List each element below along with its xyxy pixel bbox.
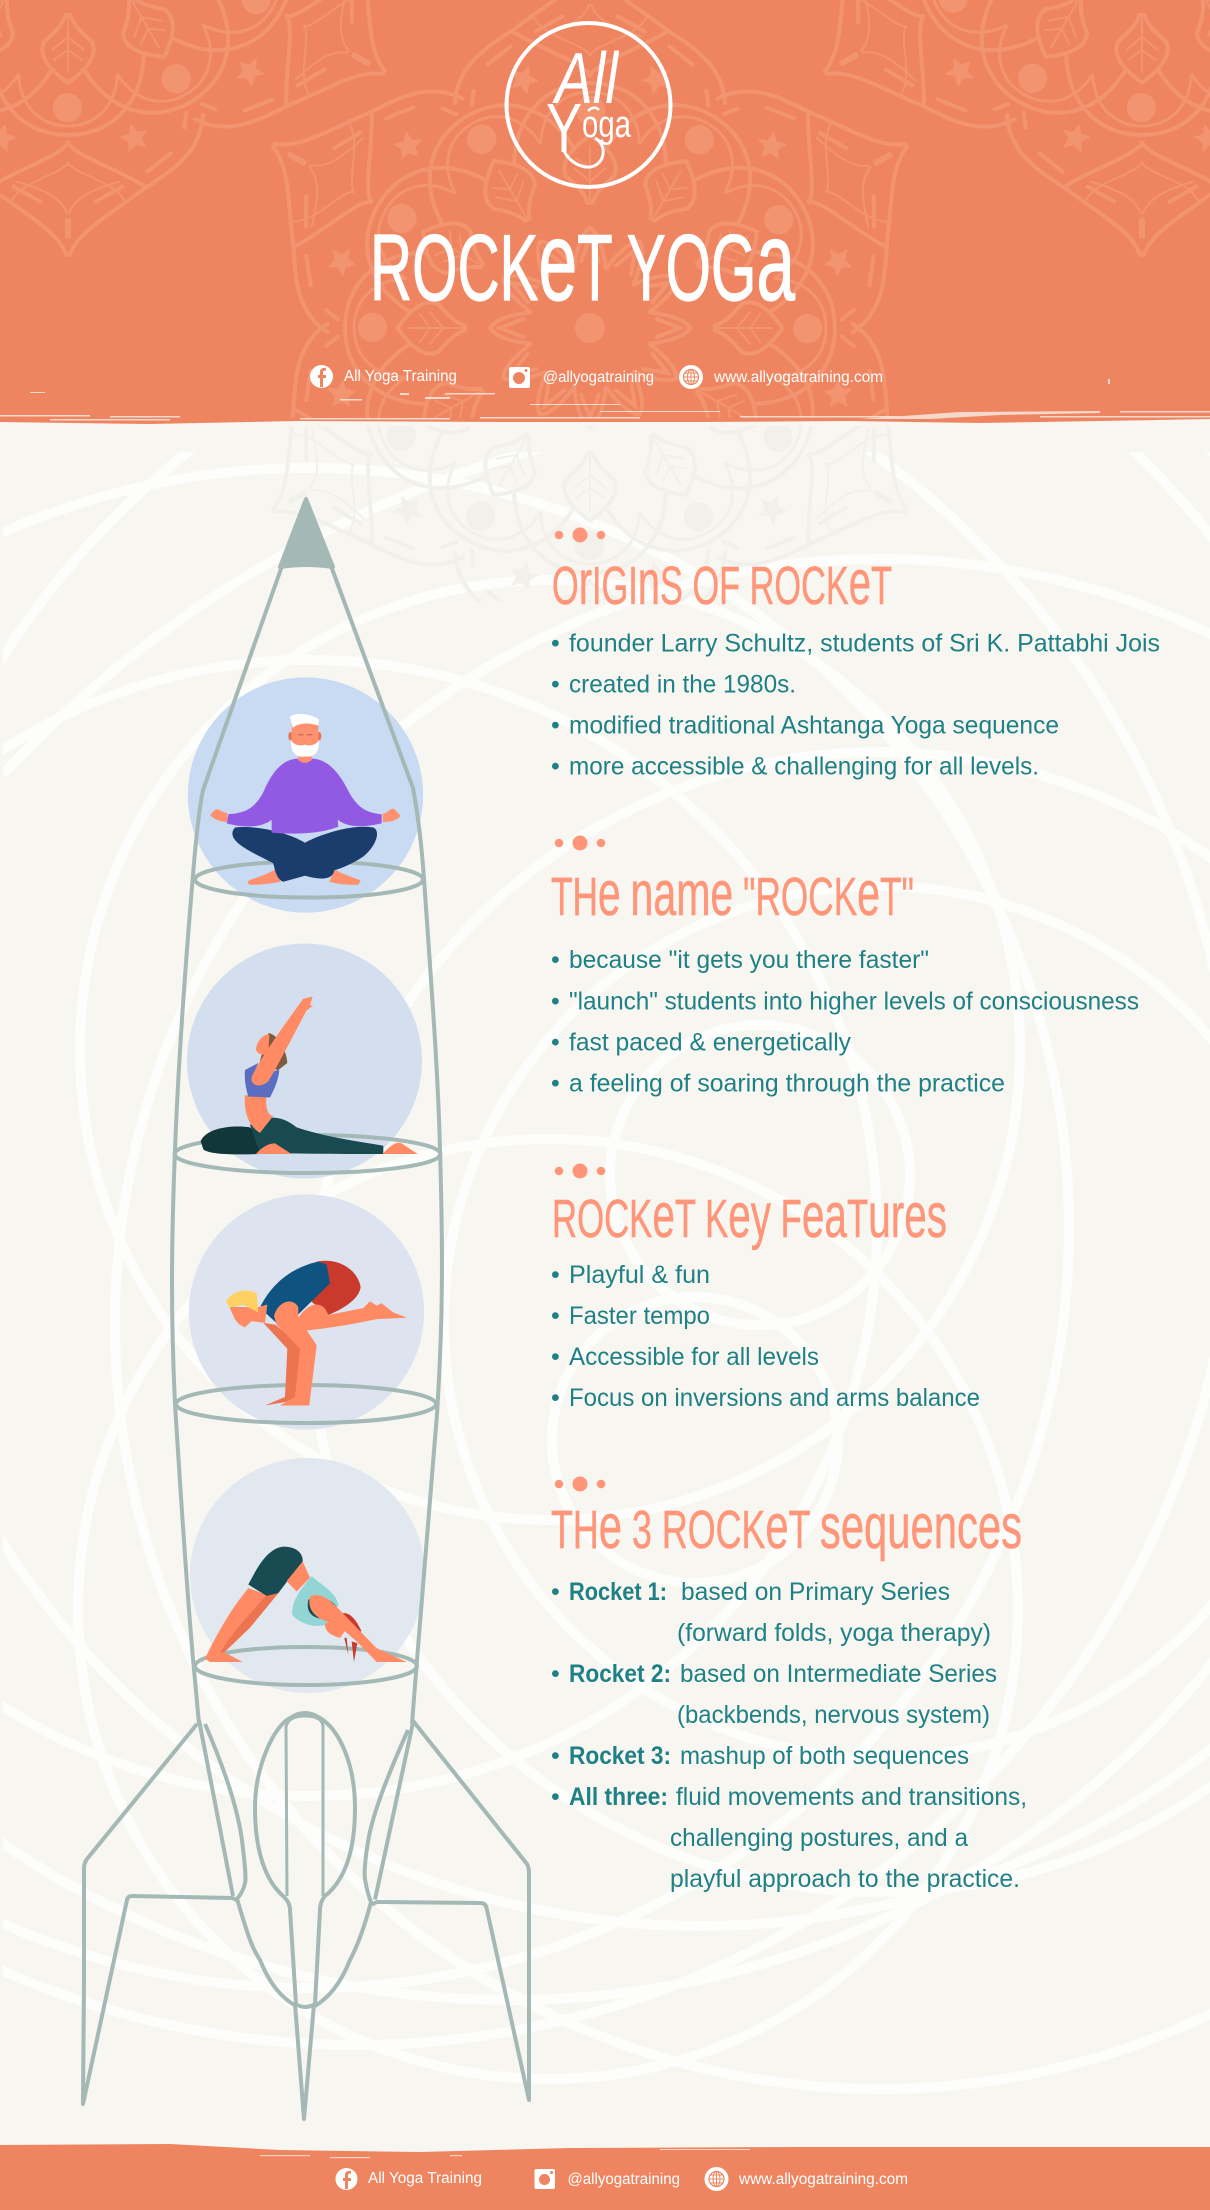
bullet list: fluid movements and transitions, (676, 1783, 1027, 1811)
logo: All Yoga (506, 23, 670, 187)
bullet list: because "it gets you there faster" (569, 946, 929, 974)
bullet list: • (551, 1578, 560, 1606)
figure: king pigeon pose (201, 996, 418, 1154)
bullet list: Rocket 2: (569, 1660, 671, 1688)
bullet list: • (551, 1660, 560, 1688)
bullet list: • (551, 1028, 560, 1056)
section: origins of rocket (551, 528, 1160, 780)
heading: ROCKeT Key FeaTures (552, 1181, 947, 1251)
heading: OrIGInS OF ROCKeT (552, 548, 892, 618)
icon: facebook (336, 2168, 358, 2190)
bullet list: based on Primary Series (681, 1578, 950, 1606)
bullet list: Focus on inversions and arms balance (569, 1384, 980, 1412)
bullet list: (backbends, nervous system) (677, 1701, 990, 1729)
bullet list: "launch" students into higher levels of consciousness (569, 988, 1139, 1016)
bullet list: • (551, 1070, 560, 1098)
bullet list: challenging postures, and a (670, 1824, 968, 1852)
faint mandala behind the top of the body (284, 452, 896, 602)
bullet list: Rocket 3: (569, 1742, 671, 1770)
bullet list: mashup of both sequences (680, 1742, 969, 1770)
bullet list: founder Larry Schultz, students of Sri K. Pattabhi Jois (569, 630, 1160, 658)
background pattern: overlapping white circles (3, 452, 1210, 2094)
bullet list: Accessible for all levels (569, 1343, 819, 1371)
bullet list: • (551, 946, 560, 974)
label: facebook: All Yoga Training (368, 2170, 482, 2187)
bullet list: a feeling of soaring through the practice (569, 1070, 1005, 1098)
bullet list: based on Intermediate Series (680, 1660, 997, 1688)
pose circle 4 (190, 1458, 425, 1693)
rocket illustration (83, 499, 529, 2119)
bullet list: • (551, 1384, 560, 1412)
bullet list: • (551, 1302, 560, 1330)
bullet list (551, 1261, 980, 1412)
bullet list: • (551, 670, 560, 698)
footer brush streaks (260, 2149, 750, 2158)
label: website: www.allyogatraining.com (713, 369, 883, 386)
pose circle 1 (188, 677, 423, 913)
dots (555, 528, 605, 542)
bullet list: • (551, 1742, 560, 1770)
section: rocket key features (551, 1164, 980, 1412)
bullet list: modified traditional Ashtanga Yoga sequence (569, 712, 1059, 740)
dots (555, 1476, 605, 1492)
bullet list: more accessible & challenging for all levels. (569, 752, 1039, 780)
dots (555, 836, 605, 850)
bullet list: created in the 1980s. (569, 670, 796, 698)
bullet list: • (551, 712, 560, 740)
bullet list: Playful & fun (569, 1261, 710, 1289)
dots (555, 1164, 605, 1178)
bullet list: • (551, 988, 560, 1016)
icon: facebook (310, 365, 333, 388)
label: website: www.allyogatraining.com (738, 2171, 908, 2188)
label: instagram: @allyogatraining (543, 369, 654, 386)
figure: crow pose (226, 1261, 407, 1406)
icon: globe (704, 2167, 728, 2191)
header band (0, 0, 1210, 424)
logo: All Yoga: Y (546, 89, 593, 167)
bullet list: • (551, 630, 560, 658)
bullet list (551, 630, 1160, 780)
label: facebook: All Yoga Training (344, 368, 457, 385)
heading: THe 3 ROCKeT sequences (551, 1492, 1022, 1562)
label: instagram: @allyogatraining (568, 2171, 680, 2188)
section: the 3 rocket sequences (551, 1476, 1027, 1893)
bullet list: • (551, 1343, 560, 1371)
icon: instagram (509, 367, 530, 388)
bullet list: Faster tempo (569, 1302, 710, 1330)
bullet list: (forward folds, yoga therapy) (677, 1619, 991, 1647)
section: the name rocket (551, 836, 1139, 1098)
title: ROCKeT YOGa (370, 199, 795, 324)
bullet list: All three: (569, 1783, 668, 1811)
bullet list: fast paced & energetically (569, 1028, 851, 1056)
header social links (310, 365, 883, 389)
heading: THe name "ROCKeT" (551, 859, 914, 929)
bullet list: Rocket 1: (569, 1578, 667, 1606)
bullet list: • (551, 1783, 560, 1811)
brush edge streaks (0, 379, 1210, 420)
figure: meditating man (210, 714, 401, 885)
icon: globe (679, 365, 703, 389)
pose circle 2 (187, 944, 422, 1178)
footer band (0, 2144, 1210, 2210)
pose circle 3 (189, 1194, 424, 1430)
bullet list: • (551, 1261, 560, 1289)
header mandala pattern (0, 0, 1210, 693)
bullet list: • (551, 752, 560, 780)
bullet list (551, 946, 1139, 1098)
bullet list: playful approach to the practice. (670, 1865, 1020, 1893)
rocket outline (83, 499, 529, 2119)
figure: downward dog (205, 1547, 407, 1662)
icon: instagram (534, 2169, 555, 2189)
logo: All Yoga: All (552, 39, 620, 119)
logo: All Yoga: oga (582, 104, 632, 146)
bullet list (551, 1578, 1027, 1893)
